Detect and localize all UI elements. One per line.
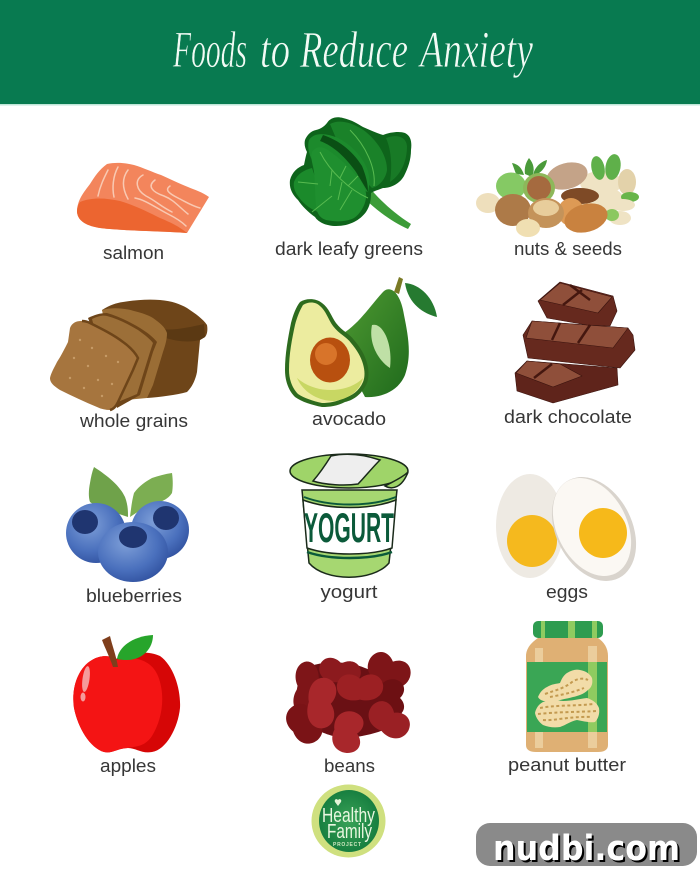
label: dark chocolate <box>504 407 632 427</box>
label: whole grains <box>79 411 188 431</box>
food: whole grains <box>50 300 207 431</box>
yogurt wordmark: YOGURT <box>304 504 394 551</box>
label: yogurt <box>320 582 378 602</box>
icon: spinach leaves <box>290 117 411 229</box>
label: avocado <box>312 409 386 429</box>
logo: Healthy Family Project <box>312 784 386 858</box>
food: peanut butter <box>508 621 626 775</box>
icon: salmon <box>77 163 209 233</box>
label: dark leafy greens <box>275 239 423 259</box>
food: avocado <box>285 277 437 429</box>
food: dark chocolate <box>504 282 635 427</box>
icon: red apple <box>73 635 180 752</box>
icon: bread loaf <box>50 300 207 410</box>
icon: mixed nuts <box>476 153 639 237</box>
logo: Healthy Family Project: Family <box>327 821 372 843</box>
icon: boiled eggs <box>496 463 653 595</box>
title: Reduce <box>299 22 408 79</box>
food: eggs <box>496 463 653 602</box>
label: blueberries <box>86 586 182 606</box>
icon: avocado <box>285 277 437 407</box>
icon: chocolate bars <box>515 282 635 403</box>
watermark: nudbi.com: nudbi.com <box>493 829 680 869</box>
title: Foods <box>172 22 247 79</box>
label: nuts & seeds <box>514 239 622 259</box>
icon: peanut butter jar <box>526 621 608 752</box>
label: apples <box>100 756 156 776</box>
label: salmon <box>103 243 164 263</box>
food: beans <box>280 648 415 776</box>
food: apples <box>73 635 180 776</box>
label: beans <box>324 756 375 776</box>
food: nuts and seeds <box>476 153 639 259</box>
title: Anxiety <box>418 22 534 79</box>
food: dark leafy greens <box>275 117 423 259</box>
logo: Healthy Family Project: PROJECT <box>333 842 361 848</box>
title <box>172 22 534 79</box>
food: blueberries <box>66 467 189 606</box>
watermark: nudbi.com: nudbi.com <box>495 831 682 871</box>
label: peanut butter <box>508 755 626 775</box>
food: salmon <box>77 163 209 263</box>
icon: yogurt cup <box>290 454 408 577</box>
header banner <box>0 0 700 106</box>
logo: Healthy Family Project: Healthy <box>322 805 375 827</box>
label: eggs <box>546 582 588 602</box>
icon: kidney beans <box>280 648 415 755</box>
food: yogurt <box>290 454 408 602</box>
icon: blueberries <box>66 467 189 582</box>
title: to <box>260 22 290 79</box>
